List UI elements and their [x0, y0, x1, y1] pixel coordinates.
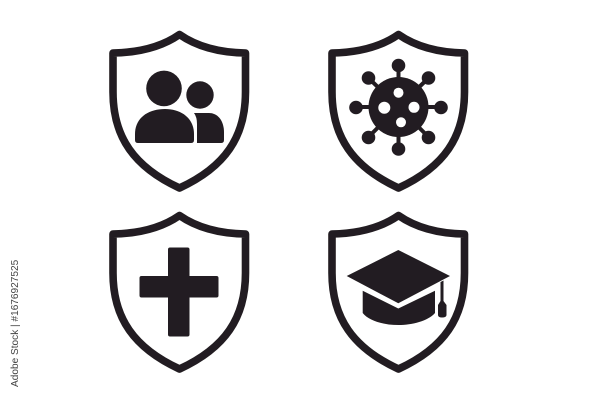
icon: graduation cap — [347, 250, 450, 325]
icon: shield with medical cross — [113, 216, 246, 369]
icon: large person — [135, 71, 194, 143]
icon: small person — [186, 81, 224, 143]
icon: virus — [349, 59, 448, 156]
icon: shield with graduation cap — [332, 216, 464, 369]
icon: shield with virus — [332, 34, 464, 188]
icon: shield with people — [113, 34, 246, 188]
icon: cross — [140, 248, 218, 336]
stock id text: Adobe Stock | #1676927525 — [10, 259, 21, 387]
